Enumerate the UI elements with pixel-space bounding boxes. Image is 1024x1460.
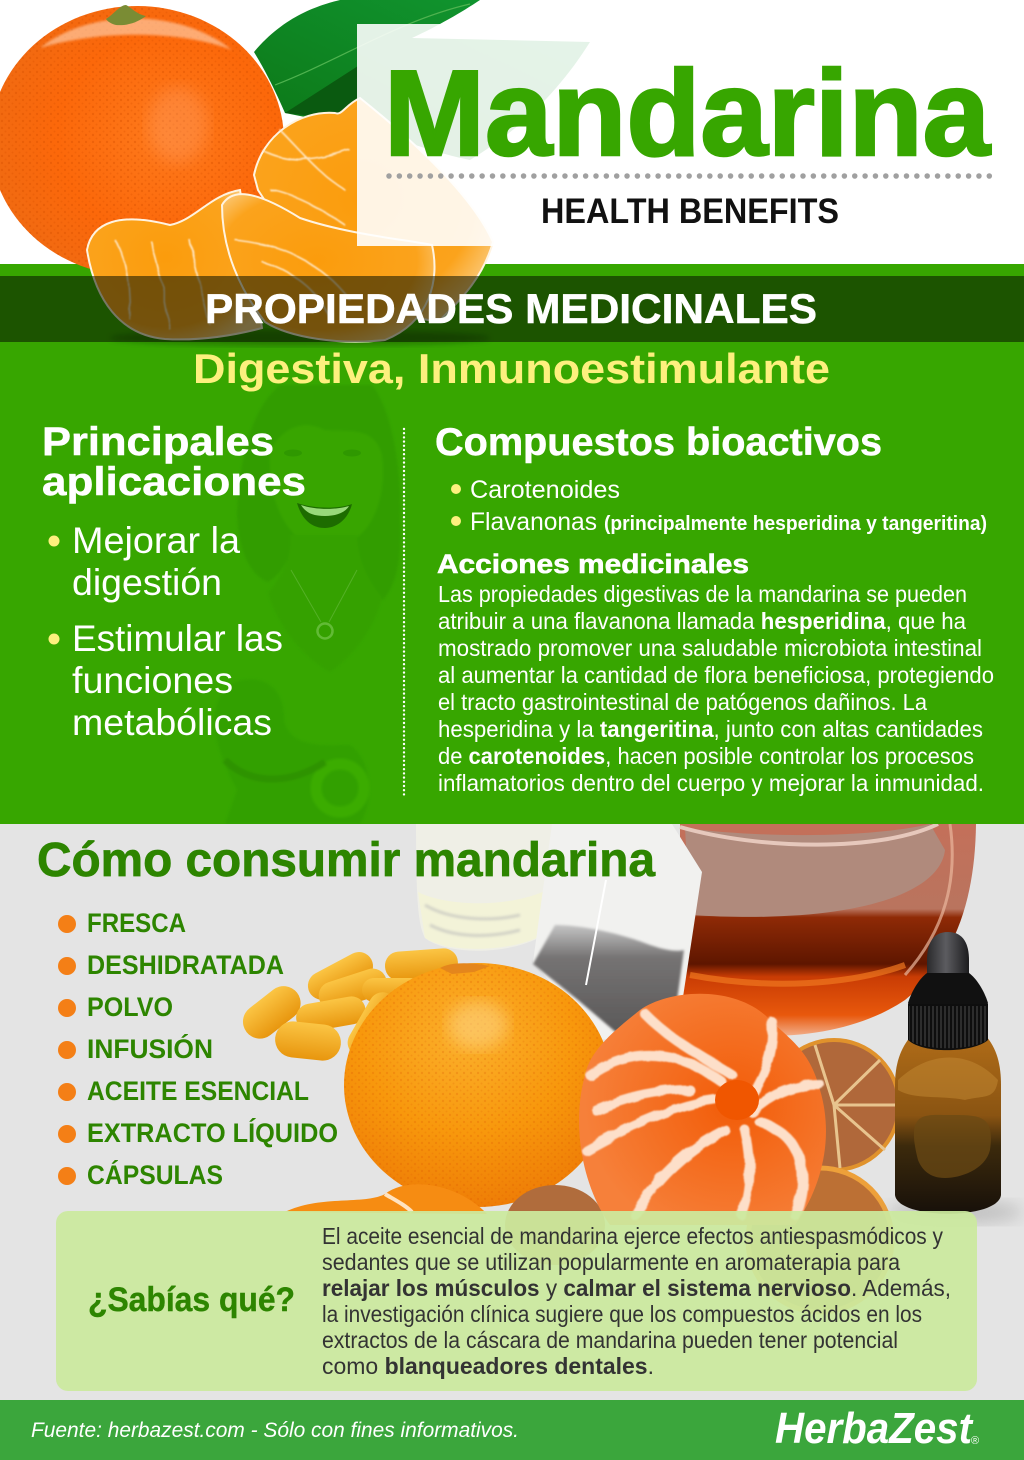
text block: medicinal actions: atribuir a una flavanona llamada hesperidina, que ha (438, 608, 966, 634)
callout text: El aceite esencial de mandarina ejerce efectos antiespasmódicos y (322, 1223, 943, 1249)
subtitle: properties: Digestiva, Inmunoestimulante (193, 345, 830, 392)
panel: medicinal properties background (0, 264, 1024, 824)
list item: capsulas: CÁPSULAS (87, 1159, 223, 1190)
callout text: relajar los músculos y calmar el sistema nervioso. Además, (322, 1275, 951, 1301)
list item: mejorar la digestion (48, 520, 240, 603)
illustration: whole mandarin (0, 5, 284, 276)
list item: estimular funciones metabolicas: funciones (72, 660, 233, 701)
illustration: water glass (416, 824, 556, 951)
logo: herbazest: ® (971, 1435, 979, 1447)
list item: flavanonas: (principalmente hesperidina y tangeritina) (604, 513, 987, 535)
callout text: extractos de la cáscara de mandarina pueden tener potencial (322, 1327, 898, 1353)
illustration: dried citrus slices (505, 1040, 899, 1312)
illustration: tea bag (533, 824, 702, 1040)
illustration: leaf (254, 0, 590, 160)
list item: flavanonas: Flavanonas (470, 508, 597, 536)
list item: estimular funciones metabolicas (48, 618, 283, 743)
title: Mandarina (384, 45, 991, 181)
callout: sabias que (56, 1211, 977, 1391)
list item: flavanonas (451, 508, 987, 536)
illustration: peeled segments (87, 98, 493, 346)
illustration: woman and digestive tract (224, 387, 398, 784)
logo: herbazest: HerbaZest (775, 1404, 974, 1453)
banner: propiedades medicinales (0, 276, 1024, 342)
text block: medicinal actions: inflamatorios dentro del cuerpo y mejorar la inmunidad. (438, 770, 984, 796)
illustration: capsules (236, 947, 459, 1062)
banner: propiedades medicinales: PROPIEDADES MEDICINALES (205, 285, 817, 332)
list item: extracto liquido: EXTRACTO LÍQUIDO (87, 1117, 338, 1148)
heading: principales aplicaciones: aplicaciones (42, 460, 306, 504)
list: consumption forms (58, 908, 338, 1190)
callout text: la investigación clínica sugiere que los compuestos ácidos en los (322, 1301, 922, 1327)
list item: mejorar la digestion: Mejorar la (72, 520, 240, 561)
list item: carotenoides: Carotenoides (470, 476, 620, 504)
list item: estimular funciones metabolicas: Estimular las (72, 618, 283, 659)
list item: polvo: POLVO (87, 992, 173, 1022)
callout text (322, 1223, 951, 1379)
list item: infusion: INFUSIÓN (87, 1033, 213, 1064)
text block: medicinal actions: Las propiedades digestivas de la mandarina se pueden (438, 581, 967, 607)
illustration: consumption forms (236, 824, 1023, 1312)
list item: mejorar la digestion: digestión (72, 562, 222, 603)
heading: acciones medicinales: Acciones medicinales (437, 549, 749, 579)
title block background (357, 24, 1024, 246)
heading: principales aplicaciones (42, 420, 306, 504)
footer (0, 1400, 1024, 1460)
illustration: whole orange (344, 963, 612, 1207)
source note: Fuente: herbazest.com - Sólo con fines informativos. (31, 1419, 519, 1442)
list item: estimular funciones metabolicas: metabólicas (72, 702, 272, 743)
illustration: peeled mandarin (579, 994, 826, 1225)
text block: medicinal actions: de carotenoides, hacen posible controlar los procesos (438, 743, 974, 769)
panel: principales aplicaciones (42, 420, 306, 743)
heading: compuestos bioactivos: Compuestos bioactivos (435, 421, 882, 464)
text block: medicinal actions: mostrado promover una saludable microbiota intestinal (438, 635, 982, 661)
panel: consumption background (0, 824, 1024, 1400)
text block: medicinal actions (438, 581, 994, 796)
illustration: amber bowl (680, 824, 976, 1036)
heading: principales aplicaciones: Principales (42, 420, 274, 464)
heading: como consumir mandarina: Cómo consumir mandarina (37, 834, 655, 887)
callout text: como blanqueadores dentales. (322, 1353, 654, 1379)
illustration: tangerine segment (285, 1184, 487, 1214)
callout text: sedantes que se utilizan popularmente en aromaterapia para (322, 1249, 900, 1275)
text block: medicinal actions: hesperidina y la tangeritina, junto con altas cantidades (438, 716, 983, 742)
text block: medicinal actions: el tracto gastrointestinal de patógenos dañinos. La (438, 689, 927, 715)
title: HEALTH BENEFITS (541, 192, 839, 231)
list item: fresca: FRESCA (87, 908, 186, 938)
panel: compuestos bioactivos (435, 421, 987, 536)
text block: medicinal actions: al aumentar la cantidad de flora beneficiosa, protegiendo (438, 662, 994, 688)
list item: aceite esencial: ACEITE ESENCIAL (87, 1076, 309, 1106)
callout heading: ¿Sabías qué? (88, 1281, 295, 1319)
panel: acciones medicinales (437, 549, 994, 796)
list item: deshidratada: DESHIDRATADA (87, 950, 284, 980)
illustration: dropper bottle (887, 932, 1023, 1224)
